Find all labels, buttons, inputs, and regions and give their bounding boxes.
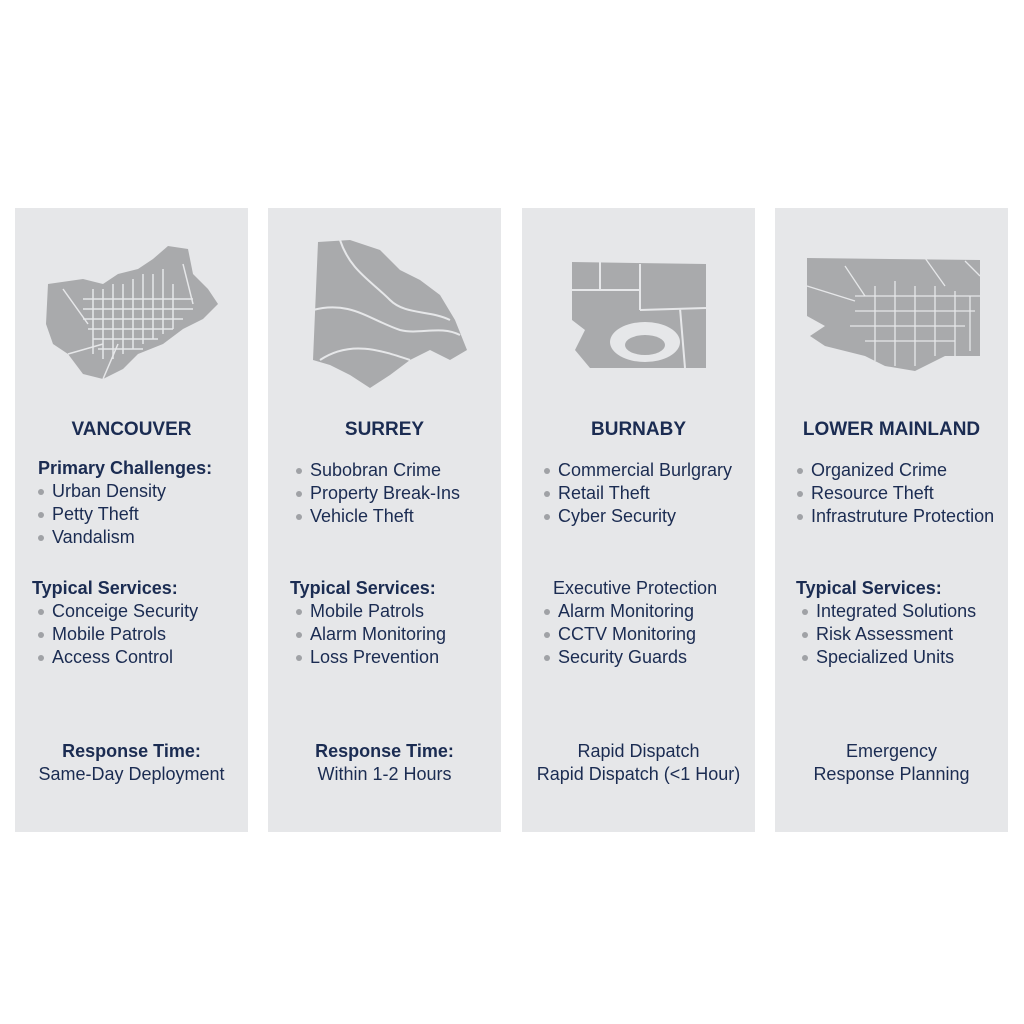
services list: Risk Assessment (816, 624, 953, 644)
response time (537, 741, 740, 784)
response time: Same-Day Deployment (38, 764, 225, 784)
services list: Executive Protection (553, 578, 717, 598)
challenges list: Vandalism (52, 527, 135, 547)
response time: Emergency (846, 741, 937, 761)
response time (38, 741, 225, 784)
challenges list (296, 460, 460, 526)
map: Lower Mainland (807, 258, 980, 371)
response time: Response Planning (813, 764, 970, 784)
challenges list: Property Break-Ins (310, 483, 460, 503)
challenges list: Cyber Security (558, 506, 676, 526)
services list: Mobile Patrols (310, 601, 424, 621)
panel: Surrey (268, 208, 501, 832)
services list: Security Guards (558, 647, 687, 667)
response time: Within 1-2 Hours (317, 764, 452, 784)
challenges list: Petty Theft (52, 504, 139, 524)
services list: Typical Services: (32, 578, 178, 598)
panel: Vancouver (15, 208, 248, 832)
challenges list (38, 458, 212, 547)
challenges list: Organized Crime (811, 460, 947, 480)
challenges list: Vehicle Theft (310, 506, 414, 526)
services list (796, 578, 976, 667)
map: Vancouver (46, 246, 218, 379)
services list: Mobile Patrols (52, 624, 166, 644)
challenges list: Primary Challenges: (38, 458, 212, 478)
panel: Lower Mainland (775, 208, 1008, 832)
panel: Burnaby (522, 208, 755, 832)
services list: Alarm Monitoring (558, 601, 694, 621)
services list: Specialized Units (816, 647, 954, 667)
response time (315, 741, 454, 784)
title: BURNABY (591, 419, 686, 440)
services list: Access Control (52, 647, 173, 667)
map: Burnaby (572, 262, 706, 368)
services list: Alarm Monitoring (310, 624, 446, 644)
challenges list (797, 460, 994, 526)
challenges list: Retail Theft (558, 483, 650, 503)
title: LOWER MAINLAND (803, 419, 980, 440)
challenges list: Infrastruture Protection (811, 506, 994, 526)
challenges list: Urban Density (52, 481, 166, 501)
title: VANCOUVER (72, 419, 192, 440)
response time: Rapid Dispatch (577, 741, 700, 761)
challenges list: Resource Theft (811, 483, 934, 503)
services list (544, 578, 717, 667)
services list: Typical Services: (796, 578, 942, 598)
challenges list: Commercial Burlgrary (558, 460, 732, 480)
map: Surrey (313, 240, 467, 388)
response time: Response Time: (62, 741, 201, 761)
services list (32, 578, 198, 667)
challenges list (544, 460, 732, 526)
services list: Typical Services: (290, 578, 436, 598)
response time: Response Time: (315, 741, 454, 761)
services list (290, 578, 446, 667)
services list: Conceige Security (52, 601, 198, 621)
challenges list: Subobran Crime (310, 460, 441, 480)
response time (813, 741, 970, 784)
title: SURREY (345, 419, 424, 440)
services list: Loss Prevention (310, 647, 439, 667)
response time: Rapid Dispatch (<1 Hour) (537, 764, 740, 784)
services list: CCTV Monitoring (558, 624, 696, 644)
services list: Integrated Solutions (816, 601, 976, 621)
